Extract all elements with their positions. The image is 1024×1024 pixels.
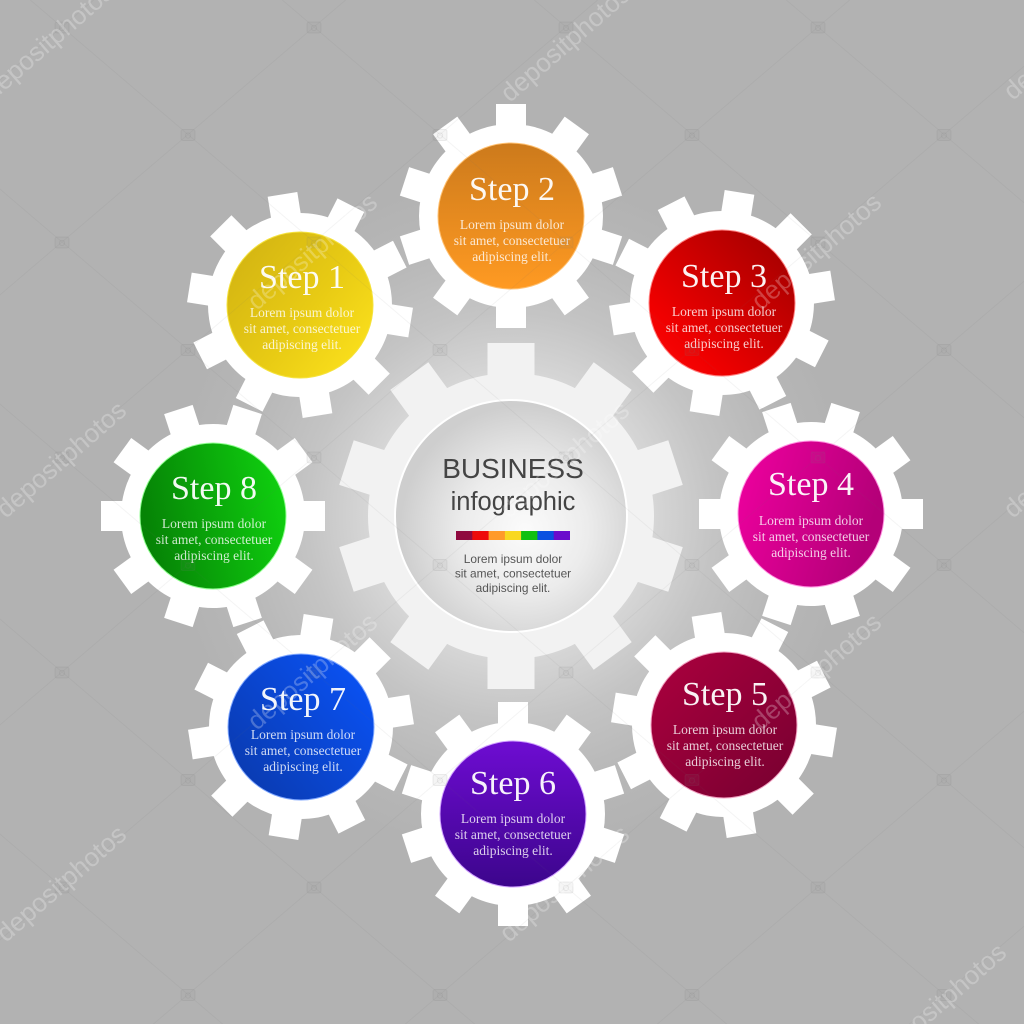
gear: Step 3: adipiscing elit. <box>684 336 764 351</box>
gear: Step 7: sit amet, consectetuer <box>245 743 362 758</box>
gear: Step 4: sit amet, consectetuer <box>753 529 870 544</box>
watermark text: depositphotos <box>241 187 383 316</box>
gear: Step 3 <box>595 175 849 431</box>
watermark text: depositphotos <box>241 607 383 736</box>
central gear <box>339 343 683 689</box>
gear: Step 4: Lorem ipsum dolor <box>759 513 864 528</box>
gear: Step 1: Step 1 <box>259 259 345 296</box>
gear: Step 5 <box>597 597 851 853</box>
gear: Step 3: Lorem ipsum dolor <box>672 304 777 319</box>
central title <box>442 453 584 516</box>
gear: Step 1: adipiscing elit. <box>262 337 342 352</box>
gear: Step 4: Step 4 <box>768 466 854 503</box>
gear: Step 5: Step 5 <box>682 676 768 713</box>
gear: Step 2: sit amet, consectetuer <box>454 233 571 248</box>
watermark text: depositphotos <box>493 819 635 948</box>
gear: Step 6: adipiscing elit. <box>473 843 553 858</box>
gear: Step 4 <box>671 373 951 655</box>
watermark text: depositphotos <box>493 395 635 524</box>
gear: Step 1: Lorem ipsum dolor <box>250 305 355 320</box>
gear: Step 1 <box>173 177 427 433</box>
gear: Step 2 <box>400 104 622 328</box>
central description: adipiscing elit. <box>476 581 550 595</box>
gear: Step 8: Step 8 <box>171 470 257 507</box>
central title: infographic <box>451 488 576 516</box>
rainbow colour bar <box>456 531 570 540</box>
gear: Step 8: sit amet, consectetuer <box>156 532 273 547</box>
gear: Step 6: sit amet, consectetuer <box>455 827 572 842</box>
gear: Step 7 <box>174 599 428 855</box>
gear: Step 7: Step 7 <box>260 681 346 718</box>
gear: Step 7: Lorem ipsum dolor <box>251 727 356 742</box>
gear: Step 5: sit amet, consectetuer <box>667 738 784 753</box>
gear: Step 2: Lorem ipsum dolor <box>460 217 565 232</box>
gear: Step 7: adipiscing elit. <box>263 759 343 774</box>
gear: Step 2: Step 2 <box>469 171 555 208</box>
watermark text: depositphotos <box>745 187 887 316</box>
central description: Lorem ipsum dolor <box>464 552 562 566</box>
central hub disc <box>395 400 627 632</box>
gear: Step 6: Lorem ipsum dolor <box>461 811 566 826</box>
gear: Step 3: Step 3 <box>681 258 767 295</box>
gear: Step 4: adipiscing elit. <box>771 545 851 560</box>
gear: Step 3: sit amet, consectetuer <box>666 320 783 335</box>
central description: sit amet, consectetuer <box>455 566 571 580</box>
gear: Step 2: adipiscing elit. <box>472 249 552 264</box>
gear: Step 8: adipiscing elit. <box>174 548 254 563</box>
watermark text: depositphotos <box>745 607 887 736</box>
gear: Step 6 <box>402 702 624 926</box>
gear: Step 5: adipiscing elit. <box>685 754 765 769</box>
central title: BUSINESS <box>442 453 584 484</box>
gear: Step 6: Step 6 <box>470 765 556 802</box>
gear: Step 1: sit amet, consectetuer <box>244 321 361 336</box>
gear: Step 5: Lorem ipsum dolor <box>673 722 778 737</box>
gear: Step 8: Lorem ipsum dolor <box>162 516 267 531</box>
gear: Step 8 <box>73 375 353 657</box>
